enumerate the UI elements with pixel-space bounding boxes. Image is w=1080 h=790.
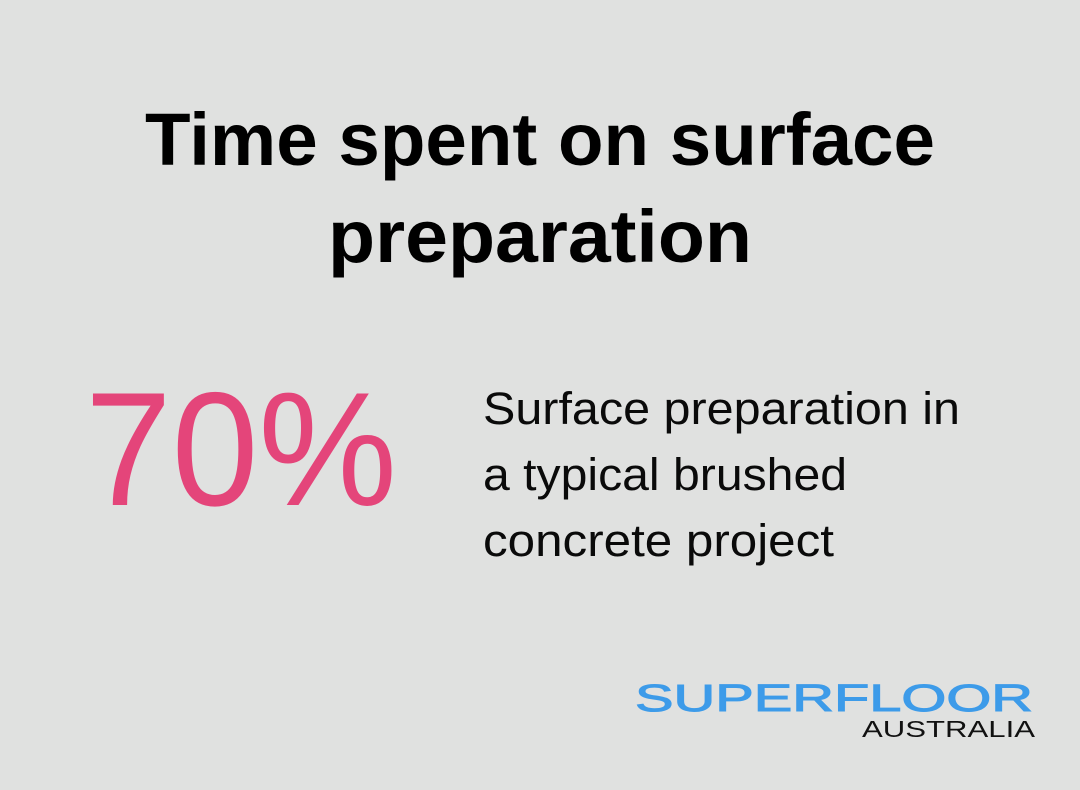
logo: Superfloor Australia: AUSTRALIA [862,716,1036,742]
title: preparation [328,195,752,278]
description text: a typical brushed [483,449,847,500]
description text [483,383,960,566]
description text: concrete project [483,515,835,566]
title [145,98,935,278]
logo: Superfloor Australia: SUPERFLOOR [635,678,1033,720]
logo: Superfloor Australia [635,678,1036,742]
title: Time spent on surface [145,98,935,181]
stat: 70%: 70% [85,359,397,540]
description text: Surface preparation in [483,383,960,434]
